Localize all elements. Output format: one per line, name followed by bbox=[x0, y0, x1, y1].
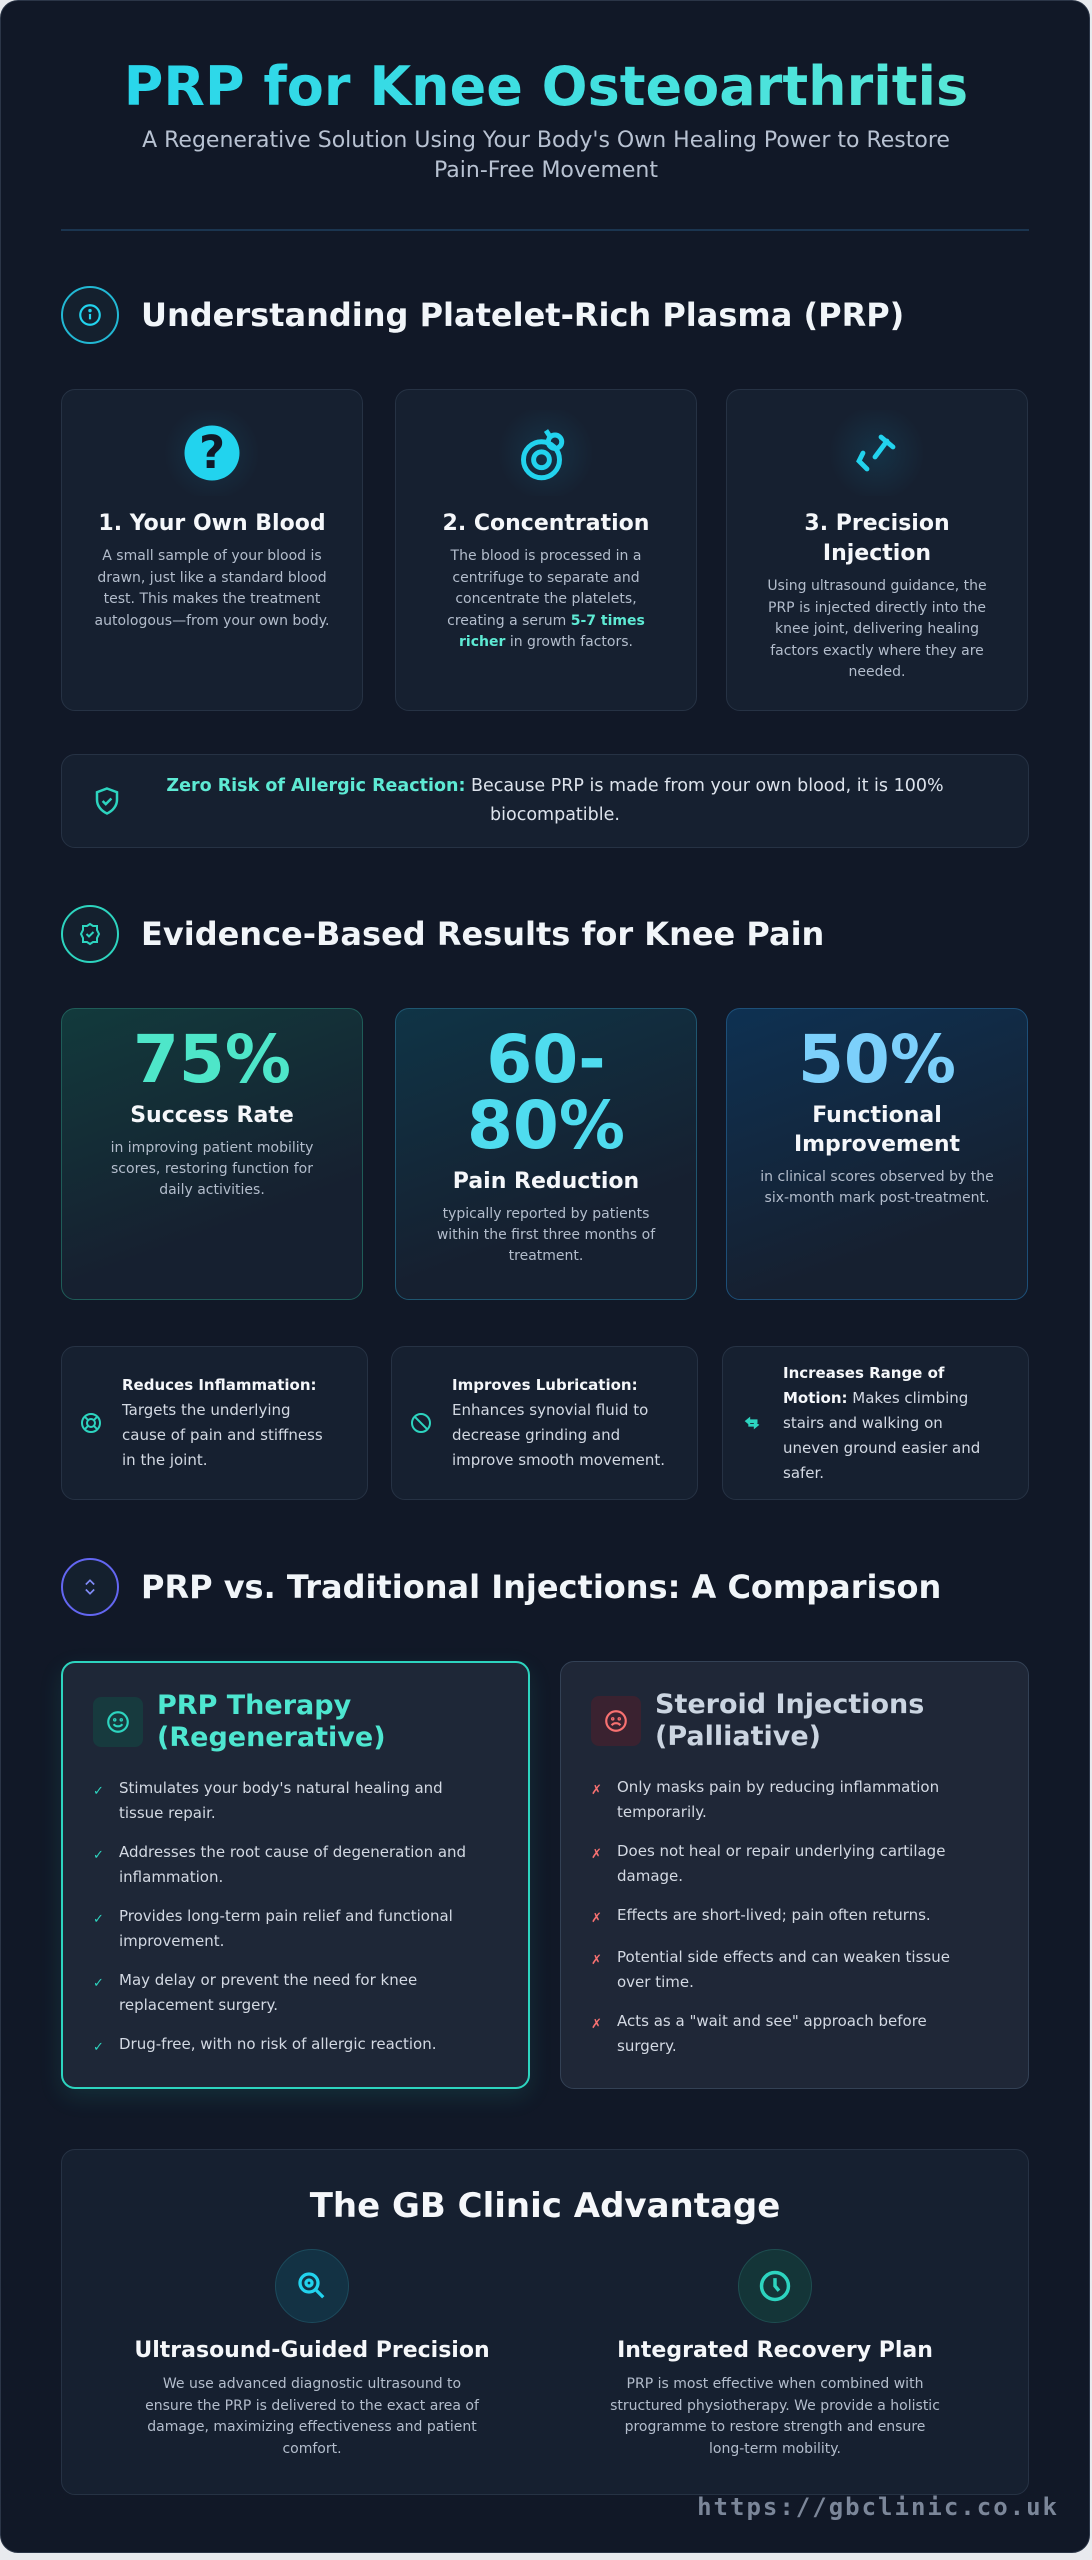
panel: PRP therapy: May delay or prevent the need for knee replacement surgery. bbox=[119, 1971, 417, 2014]
panel: steroid injections: ✗ bbox=[591, 1953, 602, 1968]
panel: step 1: 1. Your Own Blood bbox=[98, 511, 326, 536]
item: recovery plan: PRP is most effective when combined with structured physiotherapy. We provide a holistic programme to restore strength and ensure long-term mobility. bbox=[610, 2376, 940, 2456]
section heading: evidence bbox=[61, 905, 824, 963]
panel: steroid injections: Steroid Injections (Palliative) bbox=[655, 1689, 924, 1752]
title: PRP for Knee Osteoarthritis bbox=[124, 55, 968, 118]
panel: step 2 bbox=[395, 389, 697, 711]
icon: ban bbox=[411, 1413, 431, 1433]
stat: 50%: Functional Improvement bbox=[794, 1103, 960, 1157]
panel: GB clinic advantage bbox=[61, 2149, 1029, 2495]
section heading: comparison bbox=[61, 1558, 941, 1616]
feature: range of motion bbox=[722, 1346, 1029, 1500]
stat: 75%: 75% bbox=[133, 1021, 291, 1098]
panel: steroid injections: ✗ bbox=[591, 1911, 602, 1926]
section heading: comparison: PRP vs. Traditional Injections: A Comparison bbox=[141, 1568, 941, 1606]
feature: reduces inflammation bbox=[61, 1346, 368, 1500]
panel: step 1: A small sample of your blood is drawn, just like a standard blood test. This makes the treatment autologous—from your own body. bbox=[95, 548, 329, 628]
section heading: understanding PRP: Understanding Platelet-Rich Plasma (PRP) bbox=[141, 296, 904, 334]
panel: step 3: Using ultrasound guidance, the PRP is injected directly into the knee joint, delivering healing factors exactly where they are needed. bbox=[767, 578, 987, 680]
stat: 60-80% bbox=[395, 1008, 697, 1300]
panel: step 3 bbox=[726, 389, 1028, 711]
panel: PRP therapy: ✓ bbox=[93, 1784, 104, 1799]
panel: step 2: The blood is processed in a centrifuge to separate and concentrate the platelets, creating a serum 5-7 times richer in growth factors. bbox=[447, 548, 645, 650]
panel: PRP therapy bbox=[61, 1661, 530, 2089]
panel: PRP therapy: ✓ bbox=[93, 2040, 104, 2055]
panel: PRP therapy: ✓ bbox=[93, 1912, 104, 1927]
icon: arrows bbox=[744, 1416, 760, 1430]
panel: GB clinic advantage: The GB Clinic Advantage bbox=[310, 2186, 780, 2226]
panel: steroid injections: Only masks pain by reducing inflammation temporarily. bbox=[617, 1778, 939, 1821]
callout: zero allergy risk: Zero Risk of Allergic Reaction: Because PRP is made from your own blood, it is 100% biocompatible. bbox=[166, 776, 944, 825]
section heading: evidence: Evidence-Based Results for Knee Pain bbox=[141, 915, 824, 953]
footer url: https://gbclinic.co.uk bbox=[697, 2493, 1059, 2521]
panel: steroid injections: Acts as a "wait and see" approach before surgery. bbox=[617, 2012, 927, 2055]
panel: steroid injections: Does not heal or repair underlying cartilage damage. bbox=[617, 1842, 945, 1885]
feature: lubrication bbox=[391, 1346, 698, 1500]
panel: PRP therapy: Drug-free, with no risk of allergic reaction. bbox=[119, 2035, 437, 2053]
panel: PRP therapy: ✓ bbox=[93, 1848, 104, 1863]
icon: question: ? bbox=[199, 426, 225, 479]
item: ultrasound precision bbox=[134, 2249, 490, 2456]
stat: 75% bbox=[61, 1008, 363, 1300]
panel: PRP therapy: ✓ bbox=[93, 1976, 104, 1991]
stat: 60-80%: 80% bbox=[467, 1087, 625, 1164]
panel: steroid injections: ✗ bbox=[591, 2017, 602, 2032]
panel: step 2: 2. Concentration bbox=[443, 511, 649, 536]
icon: syringe bbox=[817, 410, 937, 496]
stat: 50% bbox=[726, 1008, 1028, 1300]
panel: PRP therapy: Provides long-term pain relief and functional improvement. bbox=[119, 1907, 453, 1950]
icon: question bbox=[152, 410, 272, 496]
section heading: understanding PRP bbox=[61, 286, 904, 344]
stat: 50%: 50% bbox=[798, 1021, 956, 1098]
panel: step 1 bbox=[61, 389, 363, 711]
item: ultrasound precision: We use advanced diagnostic ultrasound to ensure the PRP is delivered to the exact area of damage, maximizing effectiveness and patient comfort. bbox=[145, 2376, 479, 2456]
callout: zero allergy risk bbox=[61, 754, 1029, 848]
panel: steroid injections: Effects are short-lived; pain often returns. bbox=[617, 1906, 931, 1924]
panel: PRP therapy: Stimulates your body's natural healing and tissue repair. bbox=[119, 1779, 443, 1822]
panel: steroid injections: ✗ bbox=[591, 1847, 602, 1862]
stat: 50%: in clinical scores observed by the six-month mark post-treatment. bbox=[760, 1169, 994, 1206]
feature: reduces inflammation: Reduces Inflammation: Targets the underlying cause of pain and stiffness in the joint. bbox=[122, 1376, 323, 1469]
stat: 75%: in improving patient mobility scores, restoring function for daily activities. bbox=[111, 1140, 313, 1198]
panel: steroid injections: Potential side effects and can weaken tissue over time. bbox=[617, 1948, 950, 1991]
panel: PRP therapy: Addresses the root cause of degeneration and inflammation. bbox=[119, 1843, 466, 1886]
stat: 60-80%: Pain Reduction bbox=[453, 1169, 639, 1194]
item: ultrasound precision: Ultrasound-Guided Precision bbox=[134, 2338, 490, 2363]
stat: 60-80%: 60- bbox=[486, 1021, 606, 1098]
stat: 75%: Success Rate bbox=[130, 1103, 294, 1128]
panel: PRP therapy: PRP Therapy (Regenerative) bbox=[157, 1690, 386, 1753]
subtitle: A Regenerative Solution Using Your Body's Own Healing Power to Restore Pain-Free Movement bbox=[142, 128, 950, 183]
title bbox=[1, 51, 1091, 123]
stat: 60-80%: typically reported by patients within the first three months of treatment. bbox=[437, 1206, 655, 1264]
item: recovery plan: Integrated Recovery Plan bbox=[617, 2338, 933, 2363]
panel: steroid injections: ✗ bbox=[591, 1783, 602, 1798]
icon: centrifuge bbox=[486, 410, 606, 496]
icon: lifebuoy bbox=[81, 1413, 101, 1433]
panel: step 3: 3. Precision Injection bbox=[804, 511, 950, 566]
item: recovery plan bbox=[610, 2249, 940, 2456]
panel: steroid injections bbox=[560, 1661, 1029, 2089]
feature: lubrication: Improves Lubrication: Enhances synovial fluid to decrease grinding and improve smooth movement. bbox=[452, 1376, 665, 1469]
feature: range of motion: Increases Range of Motion: Makes climbing stairs and walking on uneven ground easier and safer. bbox=[783, 1364, 980, 1482]
icon: shield bbox=[96, 787, 118, 815]
